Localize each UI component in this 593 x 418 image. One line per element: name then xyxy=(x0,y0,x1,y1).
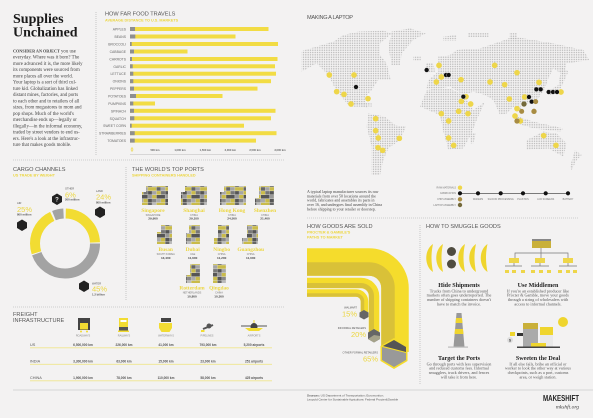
port: Busan xyxy=(157,225,175,260)
port: Guangzhou: 11,000 xyxy=(246,256,256,260)
panel: freight infrastructure xyxy=(13,312,272,381)
port: Qingdao: CHINA xyxy=(215,292,223,294)
label: air: 800 million xyxy=(17,212,32,216)
label: land: 24% xyxy=(96,192,111,201)
sources: Sources: US Department of Transportation; Euromonitor; xyxy=(307,394,384,398)
bar chart: APPLES xyxy=(113,28,127,32)
heading: PROCTER & GAMBLE'S xyxy=(307,230,351,234)
labels: INFORMAL RETAILERS xyxy=(338,326,366,330)
heading xyxy=(105,12,179,22)
port: Guangzhou: Guangzhou xyxy=(237,247,264,253)
legend: RAW MATERIALS xyxy=(436,187,456,190)
heading: HOW TO SMUGGLE GOODS xyxy=(426,224,501,230)
bar chart: SQUATCH xyxy=(110,117,127,121)
heading: US TRADE BY WEIGHT xyxy=(13,174,56,178)
heading xyxy=(132,167,204,178)
port: Busan: 13,400 xyxy=(161,256,171,260)
port: Singapore: SINGAPORE xyxy=(146,214,161,217)
bar chart: 2,000 km xyxy=(225,148,237,152)
port: Hong Kong: 24,500 xyxy=(227,216,237,220)
text: sweeten the deal: checkpoints, such as a port, customs xyxy=(508,370,569,376)
port: Dubai: UAE xyxy=(190,253,196,256)
icon: ship xyxy=(159,318,172,332)
port: Busan: Busan xyxy=(159,247,173,253)
text: hide shipments xyxy=(427,283,492,306)
port: Singapore: Singapore xyxy=(141,208,165,214)
text: use middlemen: If you're an established producer like xyxy=(507,288,569,293)
intro text block: more advanced it is, the more likely xyxy=(13,62,83,67)
legend: CHIP ASSEMBLY xyxy=(437,198,456,201)
markers: assembly xyxy=(514,99,538,124)
panel: cargo channels xyxy=(13,167,111,296)
bar chart: BROCCOLI xyxy=(108,42,126,46)
hex end: informal retailers xyxy=(368,329,380,342)
map description text: materials from over 50 locations around the xyxy=(307,193,376,198)
text: target the ports: smugglers, truck drivers, and fences xyxy=(429,370,490,376)
table rows: 3,300,000 km xyxy=(73,360,93,364)
sources xyxy=(307,394,399,402)
port: Hong Kong: Hong Kong xyxy=(219,208,246,214)
bar chart: SWEET CORN xyxy=(103,124,127,128)
table rows: 78,000 km xyxy=(116,376,132,380)
bar chart: ONIONS xyxy=(113,80,127,84)
text: hide shipments: Trucks from China to underground xyxy=(430,288,489,293)
table rows xyxy=(30,343,272,381)
legend xyxy=(433,186,574,207)
intro text block: sizes, from megastores to mom and xyxy=(13,106,82,111)
intro text block: ture that makes goods mobile. xyxy=(13,143,71,148)
port: Rotterdam: NETHERLANDS xyxy=(183,292,202,294)
intro text block: CONSIDER AN OBJECT you use xyxy=(13,48,76,54)
intro text block: pop shops. Much of the world's xyxy=(13,112,74,117)
icon: buildings and bribe xyxy=(507,317,568,348)
labels: 20% xyxy=(351,330,366,339)
bar chart: 1,500 km xyxy=(200,148,212,152)
icon captions: PIPELINES xyxy=(201,334,214,338)
port: Busan: SOUTH KOREA xyxy=(157,253,175,256)
icon: pipeline xyxy=(201,324,213,332)
intro text block: traded by street vendors to end us- xyxy=(13,131,80,136)
title: Unchained xyxy=(13,26,78,40)
port: Dubai xyxy=(186,225,200,260)
icon: buildings and bribe: $ xyxy=(509,338,512,342)
bar chart: 2,500 km xyxy=(249,148,261,152)
intro text block: distant mines, factories, and ports xyxy=(13,93,78,98)
panel: how goods are sold xyxy=(307,224,408,369)
label: other xyxy=(52,186,80,205)
icon captions xyxy=(76,334,261,338)
bar chart: LETTUCE xyxy=(111,72,127,76)
intro text block: ers. Here's a look at the infrastruc- xyxy=(13,137,80,142)
table rows: 63,000 km xyxy=(116,360,132,364)
port: Qingdao: 10,300 xyxy=(214,294,224,298)
legend: LAPTOP ASSEMBLY xyxy=(433,204,456,207)
hex end: walmart xyxy=(360,310,368,320)
labels: 65% xyxy=(363,354,378,364)
text: hide shipments: have to match the invoice. xyxy=(437,302,481,306)
map description text: A typical laptop manufacturer sources its raw xyxy=(307,189,379,194)
icon: truck xyxy=(78,318,90,332)
intro text block: ture kid. Globalization has linked xyxy=(13,87,78,92)
intro text block: everyday. Where was it born? The xyxy=(13,56,79,61)
markers: fabrication xyxy=(354,68,559,104)
table rows: 58,000 km xyxy=(200,376,216,380)
heading: AVERAGE DISTANCE TO U.S. MARKETS xyxy=(105,18,179,22)
heading: CARGO CHANNELS xyxy=(13,167,66,173)
labels: OTHER FORMAL RETAILERS xyxy=(343,350,378,354)
heading: MAKING A LAPTOP xyxy=(307,15,353,21)
bar chart: BEANS xyxy=(114,35,127,39)
port: Dubai: Dubai xyxy=(186,247,200,253)
intro text block: its components were sourced from xyxy=(13,68,80,73)
port: Singapore: 29,900 xyxy=(148,216,158,220)
logo: makeshift xyxy=(543,393,580,410)
bar chart: 500 km xyxy=(150,148,160,152)
panel: making a laptop xyxy=(302,15,589,211)
intro text block: to each other and to retailers of all xyxy=(13,100,80,104)
text: target the ports: Target the Ports xyxy=(438,356,481,362)
bar chart: GARLIC xyxy=(113,65,127,69)
table rows: INDIA xyxy=(30,360,41,364)
table rows: 23,000 km xyxy=(200,360,216,364)
port: Shanghai: 29,100 xyxy=(189,216,199,220)
legend: SILICON PROCESSING xyxy=(488,198,514,201)
bar chart: 0 xyxy=(131,148,134,154)
text: use middlemen: Procter & Gamble, move your goods xyxy=(507,292,569,298)
text: use middlemen: Use Middlemen xyxy=(518,283,559,289)
heading: FREIGHT xyxy=(13,312,38,318)
label: water xyxy=(79,280,107,296)
icon: train xyxy=(118,318,129,332)
heading: PATHS TO MARKET xyxy=(307,236,344,240)
intro text block: merchandise ends up—legally or xyxy=(13,118,77,123)
port: Shenzhen: Shenzhen xyxy=(254,208,276,214)
legend: WAFERS xyxy=(473,198,483,201)
label: land xyxy=(95,189,111,218)
text: target the ports: will take it from here. xyxy=(441,374,477,379)
heading xyxy=(13,312,65,324)
port: Dubai: 11,600 xyxy=(188,256,198,260)
port: Singapore xyxy=(141,186,168,220)
text: hide shipments: Hide Shipments xyxy=(438,283,480,289)
port: Shanghai xyxy=(181,186,207,220)
port: Shanghai: Shanghai xyxy=(183,208,205,214)
markers: raw materials xyxy=(326,62,564,153)
port: Qingdao: Qingdao xyxy=(209,286,229,292)
heading xyxy=(307,224,373,240)
port: Shanghai: CHINA xyxy=(190,214,198,217)
table rows: 793,000 km xyxy=(199,343,217,347)
bar chart: 1,000 km xyxy=(174,148,186,152)
label: land: LAND xyxy=(96,189,103,193)
port: Hong Kong: CHINA xyxy=(228,214,236,217)
legend: PLASTICS xyxy=(517,198,529,201)
icon: bananas xyxy=(426,244,488,272)
panel: how far food travels xyxy=(99,12,286,154)
table rows: 5,200 airports xyxy=(244,343,265,347)
pipe chart xyxy=(307,262,395,352)
port: Guangzhou xyxy=(237,225,264,260)
table rows: US xyxy=(30,343,36,347)
text: target the ports xyxy=(427,356,492,379)
text: use middlemen: through a string of wholesalers with xyxy=(508,297,569,302)
legend: LCD SCREENS xyxy=(537,198,555,201)
text: hide shipments: markets often goes underreported. The xyxy=(427,292,491,298)
map description text: world, fabricates and assembles its parts in xyxy=(307,198,374,204)
title: Supplies xyxy=(13,12,64,27)
text: use middlemen: access to informal channels. xyxy=(514,302,562,306)
icon: plane xyxy=(241,320,267,331)
bar chart: POTATOES xyxy=(108,94,127,98)
port: Ningbo: CHINA xyxy=(218,253,226,256)
label: air: 25% xyxy=(17,205,32,214)
logo: makeshift: MAKESHIFT xyxy=(543,393,580,403)
bar chart: PEPPERS xyxy=(110,87,127,91)
port: Shenzhen xyxy=(254,186,276,220)
labels: WALMART xyxy=(344,306,357,310)
labels: 15% xyxy=(342,310,357,318)
donut chart xyxy=(35,214,95,274)
bar chart: PUMPKINS xyxy=(108,102,127,106)
port: Ningbo: Ningbo xyxy=(213,247,230,253)
port: Qingdao xyxy=(209,264,229,298)
label: air xyxy=(17,201,32,231)
heading: SHIPPING CONTAINERS HANDLED xyxy=(132,174,196,178)
label: other: 200 million xyxy=(65,198,80,202)
table rows: 41,000 km xyxy=(158,343,174,347)
text: hide shipments: number of shipping containers doesn't xyxy=(427,297,492,302)
map description text: before shipping to your retailer or doorstep. xyxy=(307,206,376,211)
icon captions: RAILWAYS xyxy=(118,334,131,338)
labels xyxy=(338,306,378,364)
table rows: 15,000 km xyxy=(158,360,174,364)
bar chart: 3,000 km xyxy=(274,148,286,152)
port: Rotterdam xyxy=(179,264,205,298)
table rows: 251 airports xyxy=(245,360,263,364)
logo: makeshift: mkshft.org xyxy=(556,404,579,410)
table rows: 110,000 km xyxy=(158,376,175,380)
map description text: over 16, and undergoes final assembly in China xyxy=(307,202,382,208)
panel: world's top ports xyxy=(132,167,276,298)
port: Rotterdam: 10,800 xyxy=(187,294,197,298)
intro text block: Your laptop is a sort of third cul- xyxy=(13,81,77,86)
icon captions: ROADWAYS xyxy=(76,334,90,338)
icon captions: WATERWAYS xyxy=(158,334,174,338)
port: Ningbo: 11,200 xyxy=(217,256,227,260)
label: land: 800 million xyxy=(96,200,111,204)
table rows: 226,000 km xyxy=(115,343,133,347)
intro text block: more places all over the world. xyxy=(13,74,73,80)
bar chart xyxy=(99,27,286,154)
heading: THE WORLD'S TOP PORTS xyxy=(132,167,204,173)
legend: BATTERY xyxy=(563,198,574,201)
heading: HOW GOODS ARE SOLD xyxy=(307,224,373,230)
table rows: 6,500,000 km xyxy=(73,343,93,347)
bar chart: TOMATOES xyxy=(107,139,127,143)
bar chart: SPINACH xyxy=(111,109,127,113)
text: target the ports: Go through ports with less supervision xyxy=(427,362,492,366)
bar chart: STRAWBERRIES xyxy=(99,132,127,136)
map description text xyxy=(307,189,382,211)
text: sweeten the deal: If all else fails, bribe an official or xyxy=(509,362,567,368)
text: sweeten the deal: area, or weigh station. xyxy=(519,374,557,380)
intro text block: illegally—in the informal economy, xyxy=(13,124,82,130)
title xyxy=(13,12,78,40)
icon: middlemen network xyxy=(505,239,577,273)
panel: how to smuggle goods xyxy=(426,224,577,380)
label: water: 1.2 billion xyxy=(92,292,105,296)
text: sweeten the deal: worker to look the other way at various xyxy=(505,366,571,371)
text: sweeten the deal xyxy=(505,356,571,380)
port: Hong Kong xyxy=(219,186,246,220)
table rows: CHINA xyxy=(30,376,42,380)
sources: Leopold Center for Sustainable Agriculture; Federal Procter&Gamble xyxy=(307,398,399,402)
text: sweeten the deal: Sweeten the Deal xyxy=(516,356,560,362)
legend: FABRICATION xyxy=(440,192,456,195)
dotted world map xyxy=(302,28,589,174)
hex end: other formal retailers xyxy=(380,338,408,369)
port: Guangzhou: CHINA xyxy=(247,253,255,256)
label: water: 45% xyxy=(92,285,107,294)
port: Shenzhen: 21,400 xyxy=(260,216,270,220)
label: other: 6% xyxy=(65,191,76,200)
bar chart: CARROTS xyxy=(109,58,127,62)
text: target the ports: and reduced customs fees. Informal xyxy=(429,366,490,371)
port: Ningbo xyxy=(213,225,230,260)
port: Rotterdam: Rotterdam xyxy=(179,286,205,292)
table rows: 425 airports xyxy=(245,376,263,380)
bar chart: CABBAGE xyxy=(110,50,127,54)
icon captions: AIRPORTS xyxy=(248,334,261,338)
port: Shenzhen: CHINA xyxy=(261,214,269,217)
heading: HOW FAR FOOD TRAVELS xyxy=(105,12,176,18)
heading: INFRASTRUCTURE xyxy=(13,318,65,324)
label: air: AIR xyxy=(17,201,21,205)
icon: lighthouse xyxy=(448,313,468,348)
text: use middlemen xyxy=(507,283,569,306)
heading xyxy=(13,167,66,178)
label: other: ? xyxy=(55,198,59,204)
table rows: 1,900,000 km xyxy=(73,376,93,380)
intro text block xyxy=(13,48,83,148)
label: water: WATER xyxy=(92,282,101,286)
label: other: OTHER xyxy=(65,186,74,190)
